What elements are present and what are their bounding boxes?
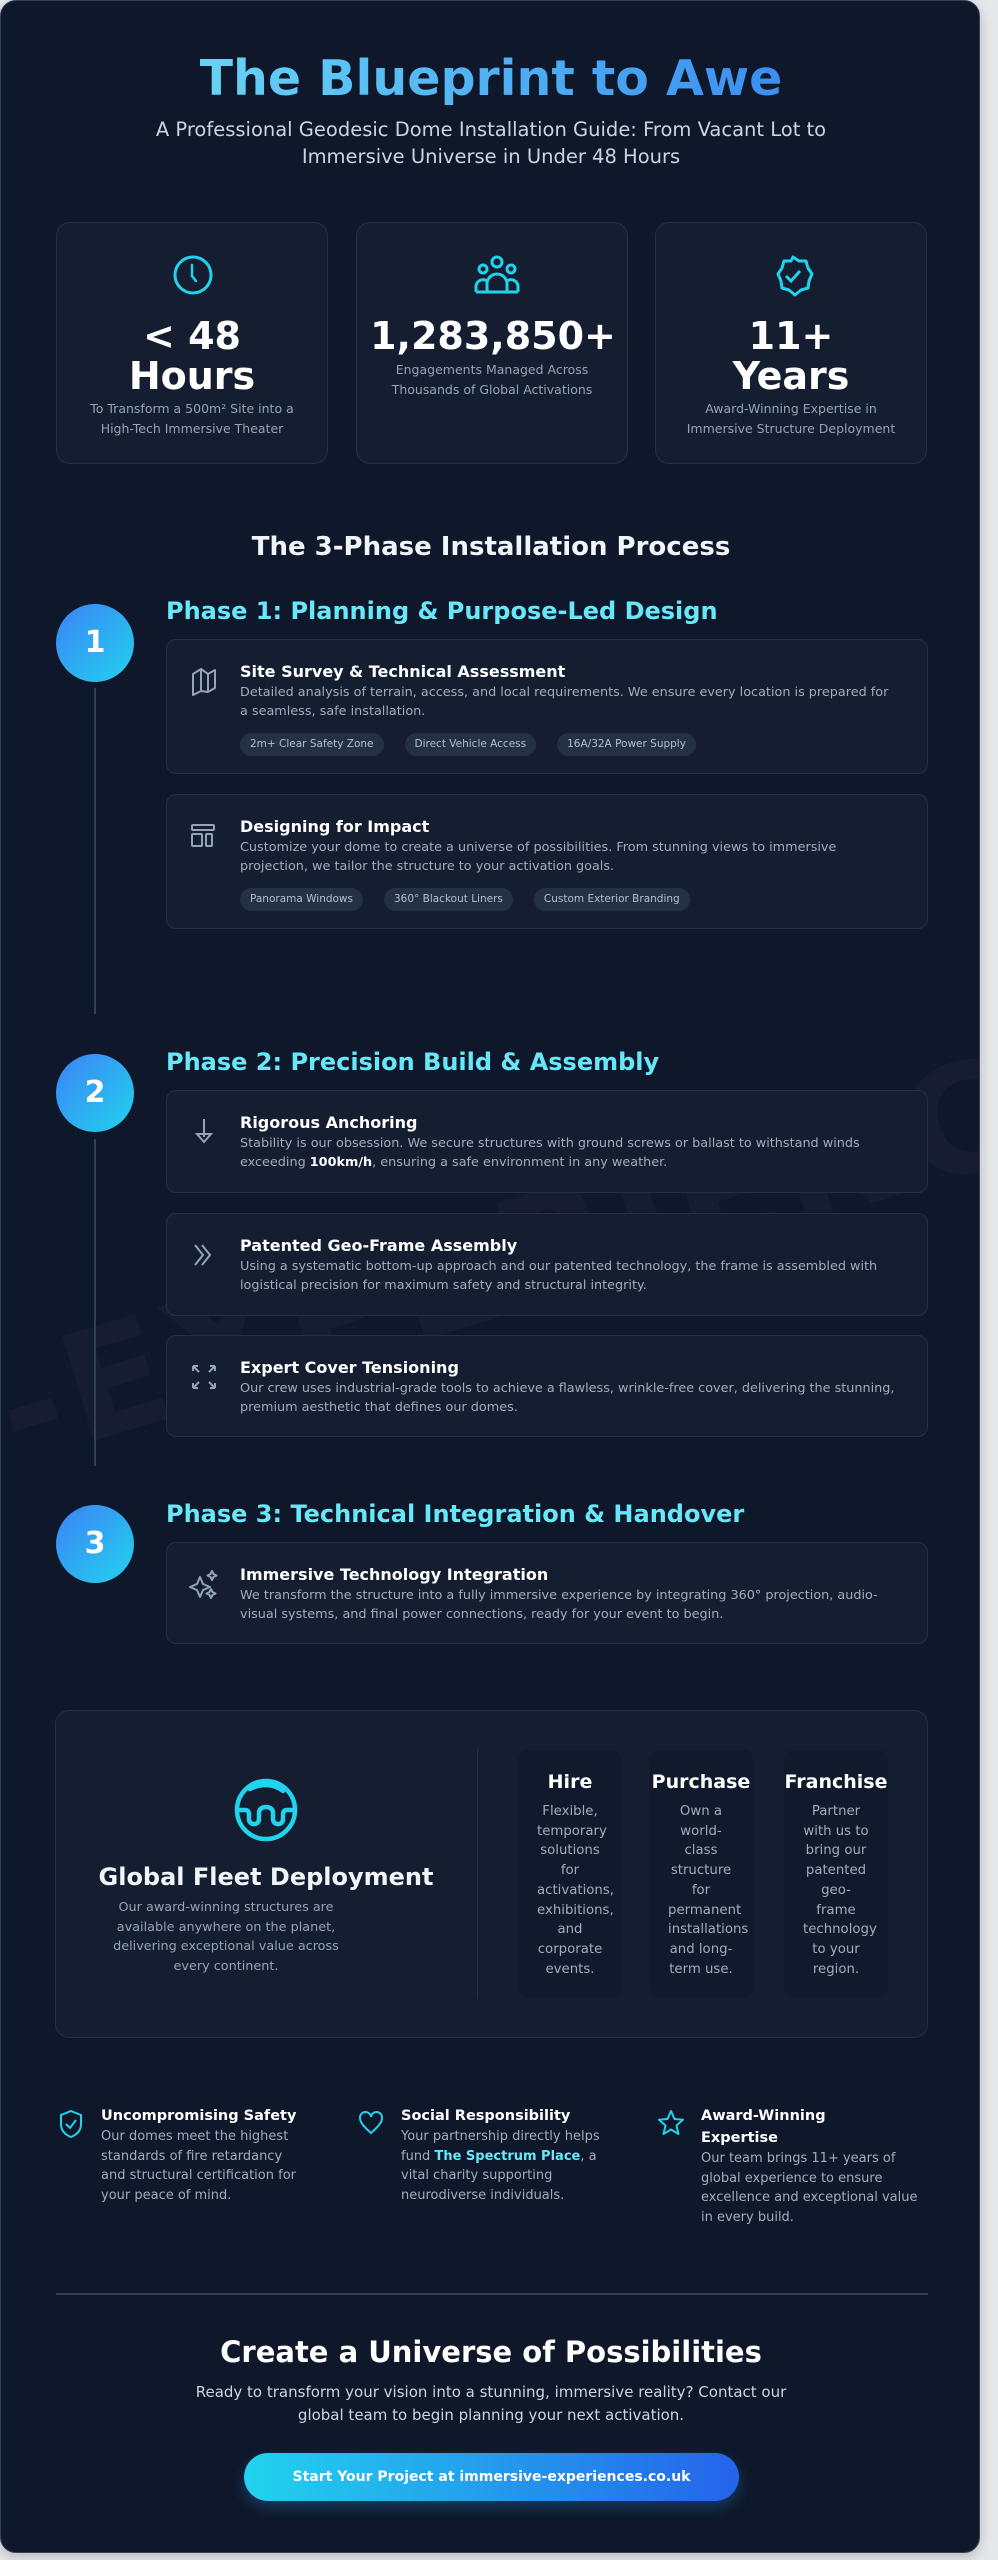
stat: engagements: Thousands of Global Activations — [392, 382, 592, 397]
CTA heading: Create a Universe of Possibilities — [220, 2335, 762, 2369]
stat: hours: High-Tech Immersive Theater — [101, 421, 283, 436]
stat: hours — [56, 222, 328, 464]
text: global fleet desc: Our award-winning structures are available anywhere on the planet, delivering exceptional value across every continent. — [113, 1900, 339, 1974]
card: anchoring: Rigorous Anchoring — [240, 1113, 417, 1132]
tags: Custom Exterior Branding — [544, 893, 680, 905]
phase 3 circle — [56, 1505, 134, 1583]
phase 3 circle: 3 — [85, 1526, 105, 1561]
icon: star — [658, 2110, 684, 2135]
phase 3 heading: Phase 3: Technical Integration & Handover — [166, 1500, 744, 1528]
icon: heart — [359, 2111, 383, 2134]
stat: hours: < 48 — [143, 314, 241, 358]
phase 1 circle: 1 — [85, 625, 105, 660]
option: hire: Hire — [548, 1771, 592, 1793]
tags — [240, 733, 696, 756]
icon: anchor down — [194, 1119, 214, 1144]
CTA text: Ready to transform your vision into a stunning, immersive reality? Contact our global team to begin planning your next activation. — [196, 2383, 786, 2424]
tags: Panorama Windows — [250, 893, 353, 905]
card: site survey: Site Survey & Technical Assessment — [240, 662, 565, 681]
divider line — [56, 2293, 928, 2295]
stat: engagements: Engagements Managed Across — [396, 362, 588, 377]
main container: Your partnership directly helps fund The Spectrum Place, a vital charity supporting neurodiverse individuals. — [401, 2129, 600, 2203]
timeline line 1 — [94, 688, 96, 1014]
stat: hours: To Transform a 500m² Site into a — [90, 401, 294, 416]
option: purchase — [649, 1750, 753, 1997]
main container: Social Responsibility — [401, 2108, 570, 2124]
icon: badge check — [776, 255, 814, 296]
main container: Our team brings 11+ years of global experience to ensure excellence and exceptional value in every build. — [701, 2151, 917, 2225]
icon: people — [474, 256, 520, 294]
card: tensioning: Our crew uses industrial-grade tools to achieve a flawless, wrinkle-free cover, delivering the stunning, premium aesthetic that defines our domes. — [240, 1381, 894, 1415]
card: designing: Designing for Impact — [240, 817, 429, 836]
stat: years: 11+ — [749, 314, 833, 358]
card: geo-frame — [166, 1213, 928, 1316]
feature: safety — [60, 2108, 296, 2203]
card: site survey — [166, 639, 928, 774]
phase 1 heading: Phase 1: Planning & Purpose-Led Design — [166, 597, 718, 625]
panel: global fleet — [55, 1710, 928, 2038]
phase 2 heading: Phase 2: Precision Build & Assembly — [166, 1048, 659, 1076]
heading: global fleet: Global Fleet Deployment — [99, 1863, 433, 1891]
tags: 16A/32A Power Supply — [567, 738, 686, 750]
icon: sparkles — [189, 1570, 218, 1599]
stat: years: Award-Winning Expertise in — [705, 401, 877, 416]
stat: years: Years — [733, 354, 849, 398]
icon: map — [192, 668, 216, 696]
tags — [240, 888, 690, 911]
tags: 360° Blackout Liners — [394, 893, 503, 905]
card: tensioning — [166, 1335, 928, 1437]
option: hire — [518, 1750, 622, 1997]
card: designing: Customize your dome to create a universe of possibilities. From stunning views to immersive projection, we tailor the structure to your activation goals. — [240, 840, 836, 874]
card: anchoring — [166, 1090, 928, 1193]
stat: hours: Hours — [129, 354, 255, 398]
card: site survey: Detailed analysis of terrain, access, and local requirements. We ensure every location is prepared for a seamless, safe installation. — [240, 685, 888, 719]
card: geo-frame: Patented Geo-Frame Assembly — [240, 1236, 517, 1255]
option: purchase: Own a world-class structure for permanent installations and long-term use. — [668, 1804, 748, 1977]
main container: Uncompromising Safety — [101, 2108, 296, 2124]
stat: engagements — [356, 222, 628, 464]
option: franchise — [784, 1750, 888, 1997]
option: purchase: Purchase — [652, 1771, 750, 1793]
stat: engagements: 1,283,850+ — [370, 314, 616, 358]
phase 1 circle — [56, 604, 134, 682]
icon: layout — [191, 824, 215, 847]
feature: social — [359, 2108, 600, 2203]
option: franchise: Franchise — [784, 1771, 887, 1793]
tags: Direct Vehicle Access — [414, 738, 526, 750]
icon: globe — [234, 1778, 298, 1842]
card: geo-frame: Using a systematic bottom-up approach and our patented technology, the frame is assembled with logistical precision for maximum safety and structural integrity. — [240, 1259, 877, 1293]
timeline line 2 — [94, 1139, 96, 1466]
card: tensioning: Expert Cover Tensioning — [240, 1358, 459, 1377]
CTA button: Start Your Project at immersive-experiences.co.uk — [293, 2469, 690, 2485]
icon: shield — [60, 2110, 82, 2138]
icon: clock — [174, 256, 212, 294]
main container: Our domes meet the highest standards of fire retardancy and structural certification for your peace of mind. — [101, 2129, 296, 2203]
stat: years — [655, 222, 927, 464]
tags: 2m+ Clear Safety Zone — [250, 738, 374, 750]
card: immersive tech: We transform the structure into a fully immersive experience by integrating 360° projection, audio-visual systems, and final power connections, ready for your event to begin. — [240, 1588, 878, 1622]
phase 2 circle — [56, 1054, 134, 1132]
card: designing — [166, 794, 928, 929]
option: franchise: Partner with us to bring our patented geo-frame technology to your region. — [803, 1804, 877, 1977]
icon: chevrons — [194, 1244, 212, 1266]
card: immersive tech — [166, 1542, 928, 1644]
subtitle: A Professional Geodesic Dome Installation Guide: From Vacant Lot to Immersive Universe in Under 48 Hours — [156, 118, 826, 168]
card: anchoring: Stability is our obsession. We secure structures with ground screws or ballast to withstand winds exceeding 100km/h, ensuring a safe environment in any weather. — [240, 1136, 860, 1170]
section heading: The 3-Phase Installation Process — [252, 532, 730, 562]
card: immersive tech: Immersive Technology Integration — [240, 1565, 548, 1584]
divider — [477, 1749, 478, 1999]
title: The Blueprint to Awe — [200, 50, 782, 107]
option: hire: Flexible, temporary solutions for activations, exhibitions, and corporate events. — [537, 1804, 614, 1977]
CTA button — [244, 2453, 739, 2501]
phase 2 circle: 2 — [85, 1075, 105, 1110]
stat: years: Immersive Structure Deployment — [687, 421, 895, 436]
icon: expand — [192, 1365, 216, 1389]
feature: award — [658, 2108, 917, 2225]
main container: Award-Winning Expertise — [701, 2108, 826, 2146]
